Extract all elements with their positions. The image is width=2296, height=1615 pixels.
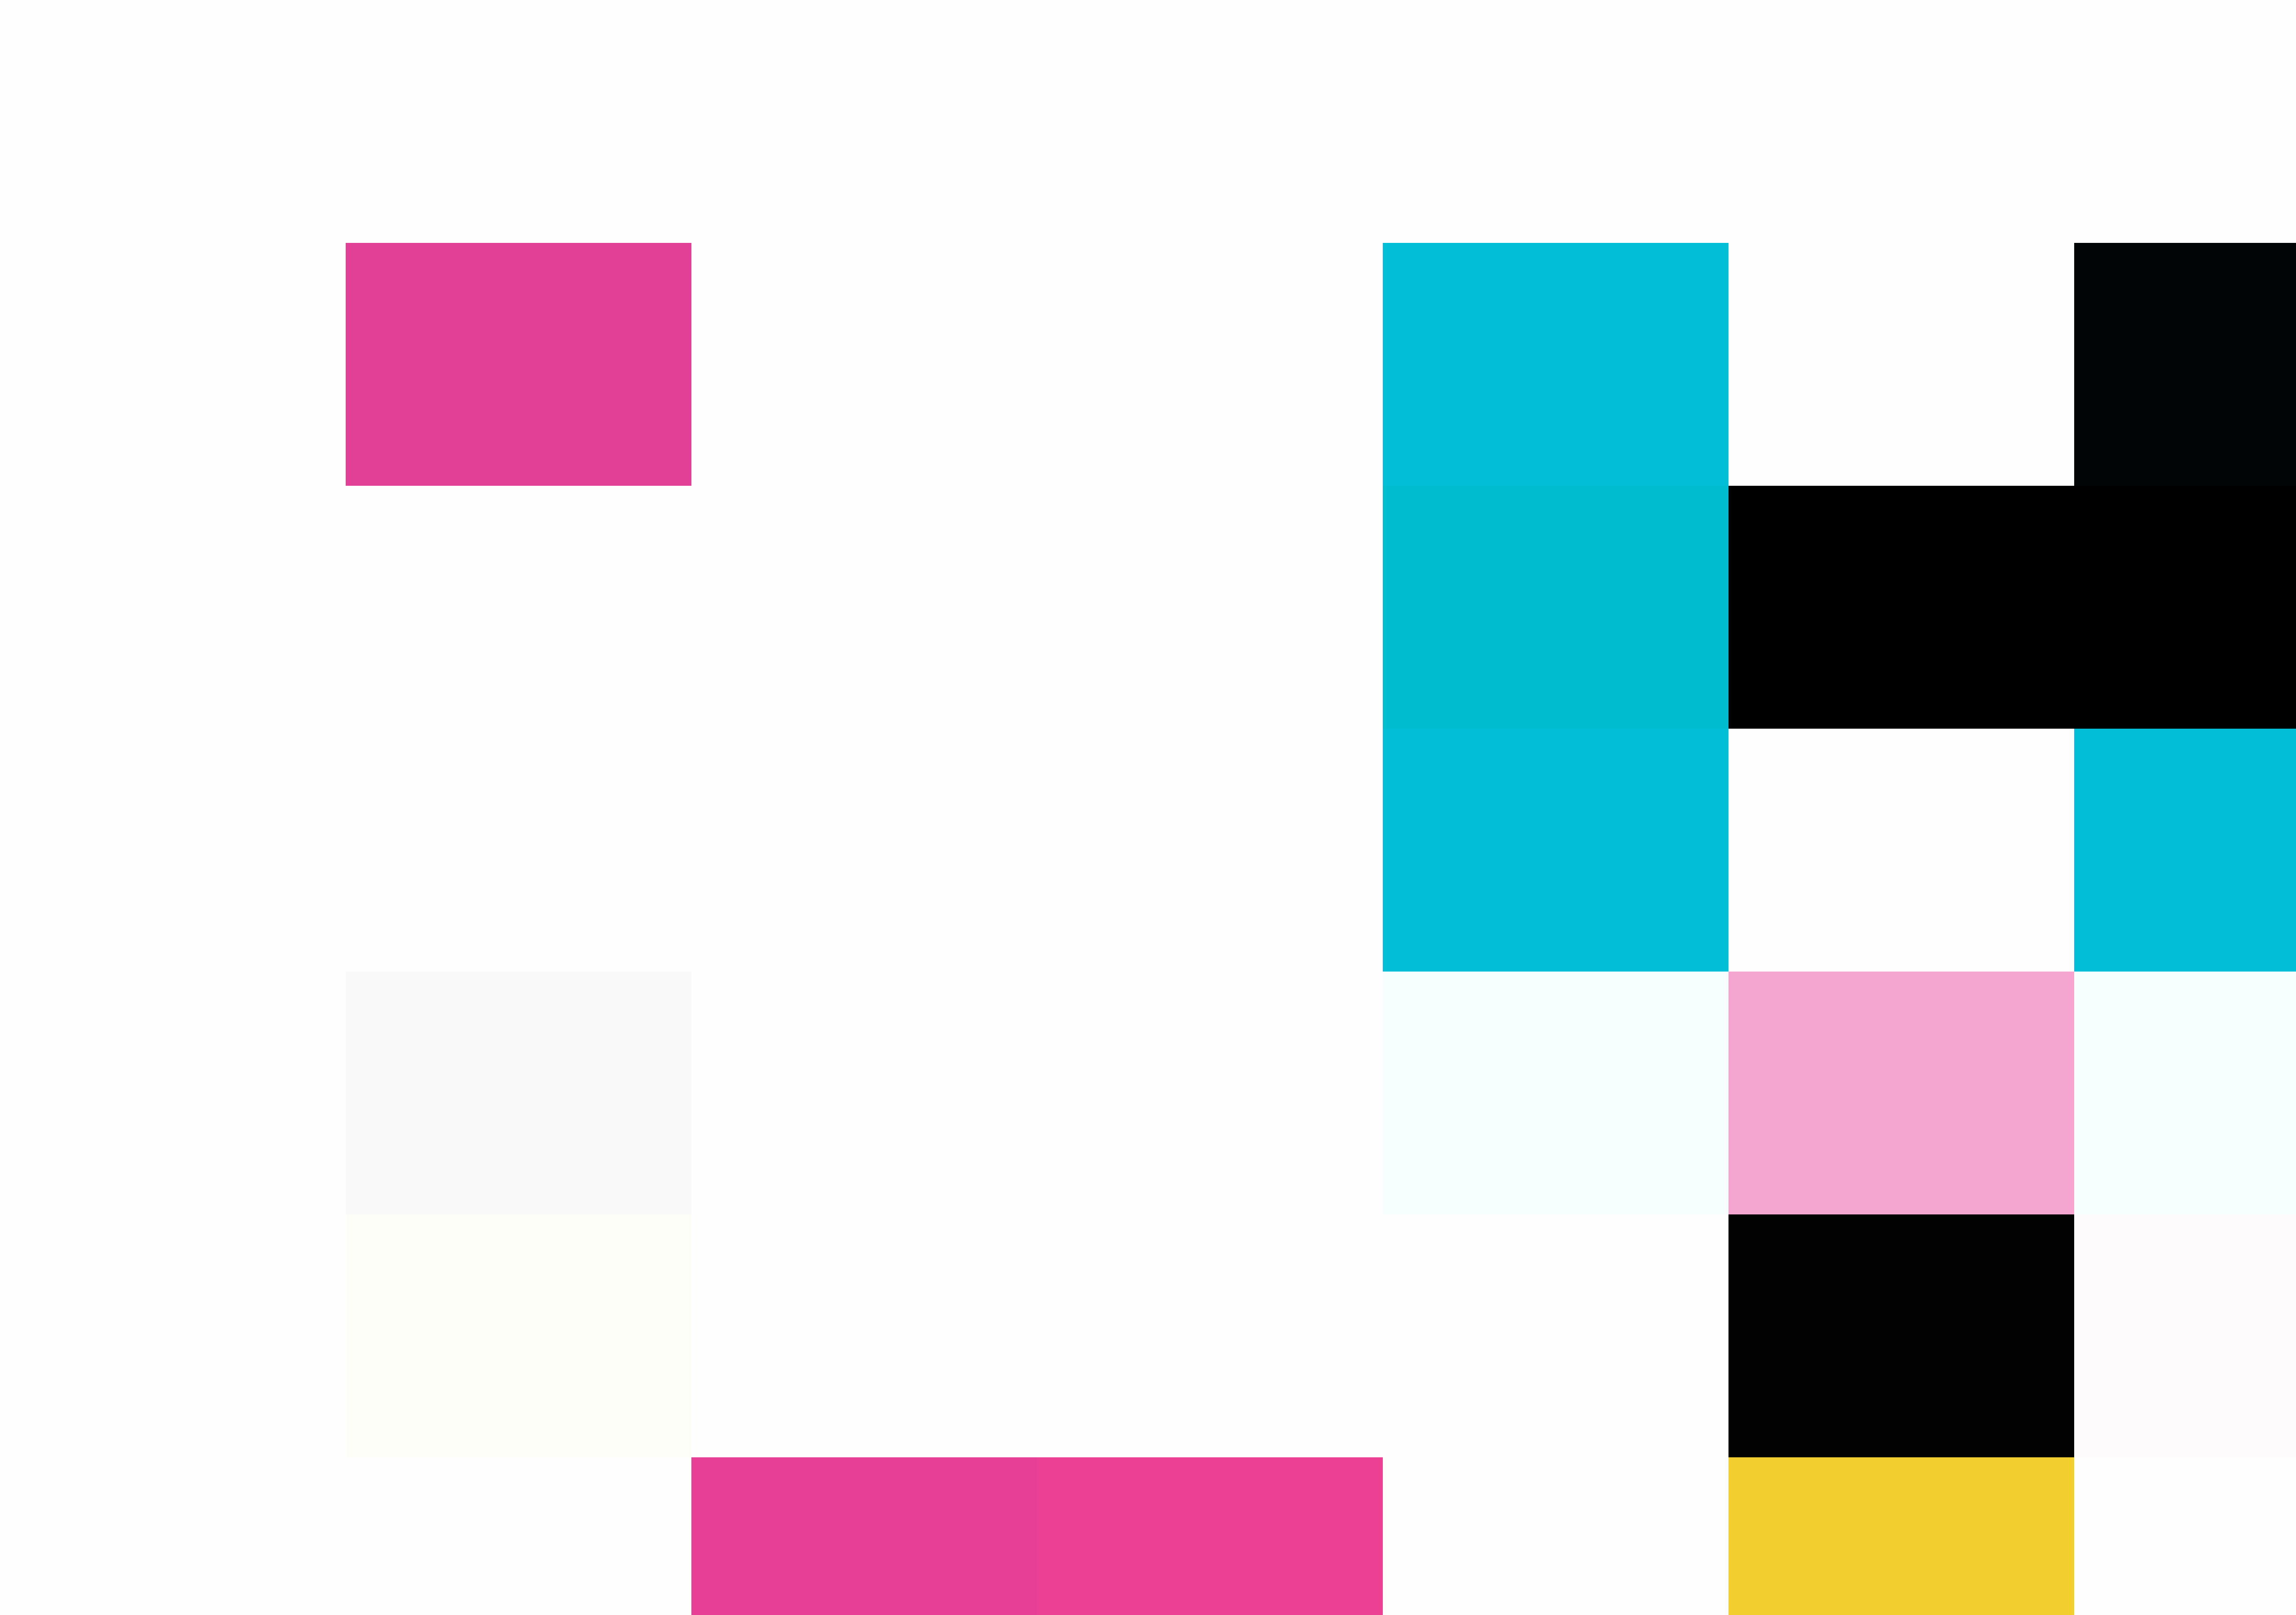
block: light pink, row 4 — [1728, 972, 2074, 1214]
block: magenta, bottom row right — [1037, 1457, 1383, 1615]
block: magenta, bottom row left — [691, 1457, 1037, 1615]
block: cyan, row 1 — [1383, 243, 1728, 486]
block: magenta, row 1 — [346, 243, 691, 486]
block: yellow, bottom row — [1728, 1457, 2074, 1615]
block: black, row 1 right edge — [2074, 243, 2296, 486]
block: pale cream, row 5 — [346, 1214, 691, 1457]
block: cyan, row 3 right edge — [2074, 729, 2296, 972]
block: pale cyan tint, row 4 right edge — [2074, 972, 2296, 1214]
block: pale grey, row 4 — [346, 972, 691, 1214]
block: black, row 2 wide — [1728, 486, 2296, 729]
block: black, row 5 — [1728, 1214, 2074, 1457]
block: darker cyan, row 2 — [1383, 486, 1728, 729]
block: cyan, row 3 — [1383, 729, 1728, 972]
block: pale cyan tint, row 4 — [1383, 972, 1728, 1214]
block: pale lilac tint, row 5 right edge — [2074, 1214, 2296, 1457]
